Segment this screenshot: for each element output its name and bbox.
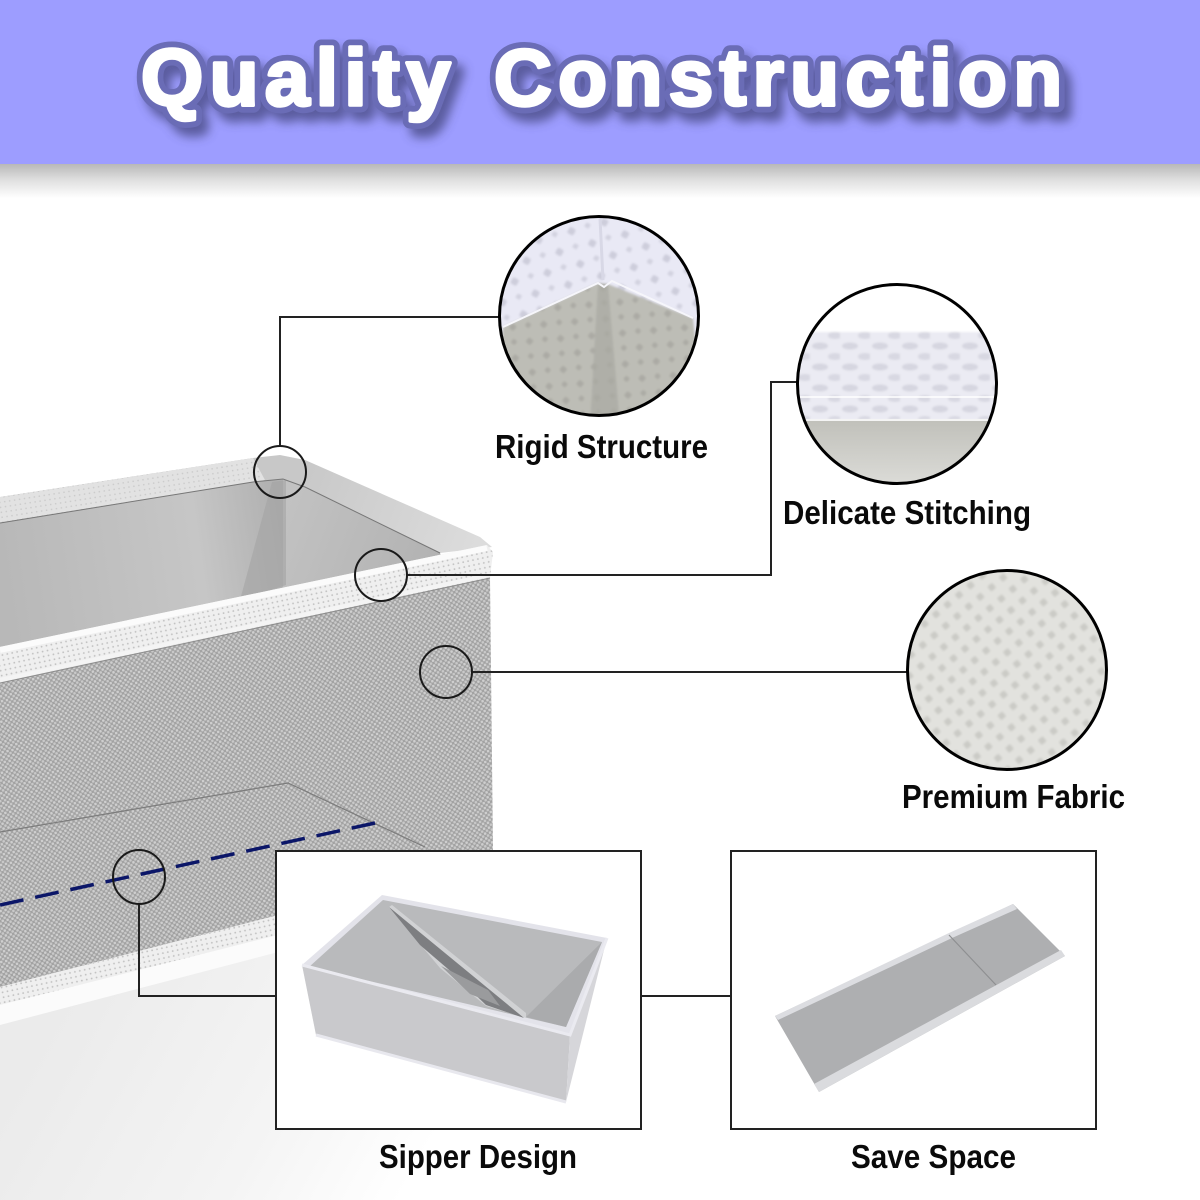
title: Quality Construction [141,33,1069,122]
zipper dashed line [0,823,375,905]
box back rim [0,455,492,553]
crease line [0,783,425,847]
label: delicate stitching: Delicate Stitching [783,494,1031,531]
storage box photo [0,455,720,1200]
folded flat box [775,904,1065,1092]
box front face fabric [0,578,493,987]
detail circle: premium fabric [900,565,1115,775]
label: sipper design: Sipper Design [379,1138,577,1175]
label: save space: Save Space [851,1138,1016,1175]
detail circle: rigid structure [498,215,700,417]
frame: sipper design [276,851,641,1129]
frame: save space [731,851,1096,1129]
floor under box [0,945,720,1200]
leader lines [139,317,907,996]
box front rim [0,545,493,683]
box interior walls [0,479,460,700]
label: premium fabric: Premium Fabric [902,778,1125,815]
label: rigid structure: Rigid Structure [495,428,708,465]
header banner [0,0,1200,198]
title: Quality Construction [141,33,1069,122]
box lower rim [0,914,282,1025]
mini open box [302,895,607,1102]
title: Quality Construction [148,42,1076,131]
callout circles on box [113,446,472,904]
detail circle: delicate stitching [795,284,1000,490]
